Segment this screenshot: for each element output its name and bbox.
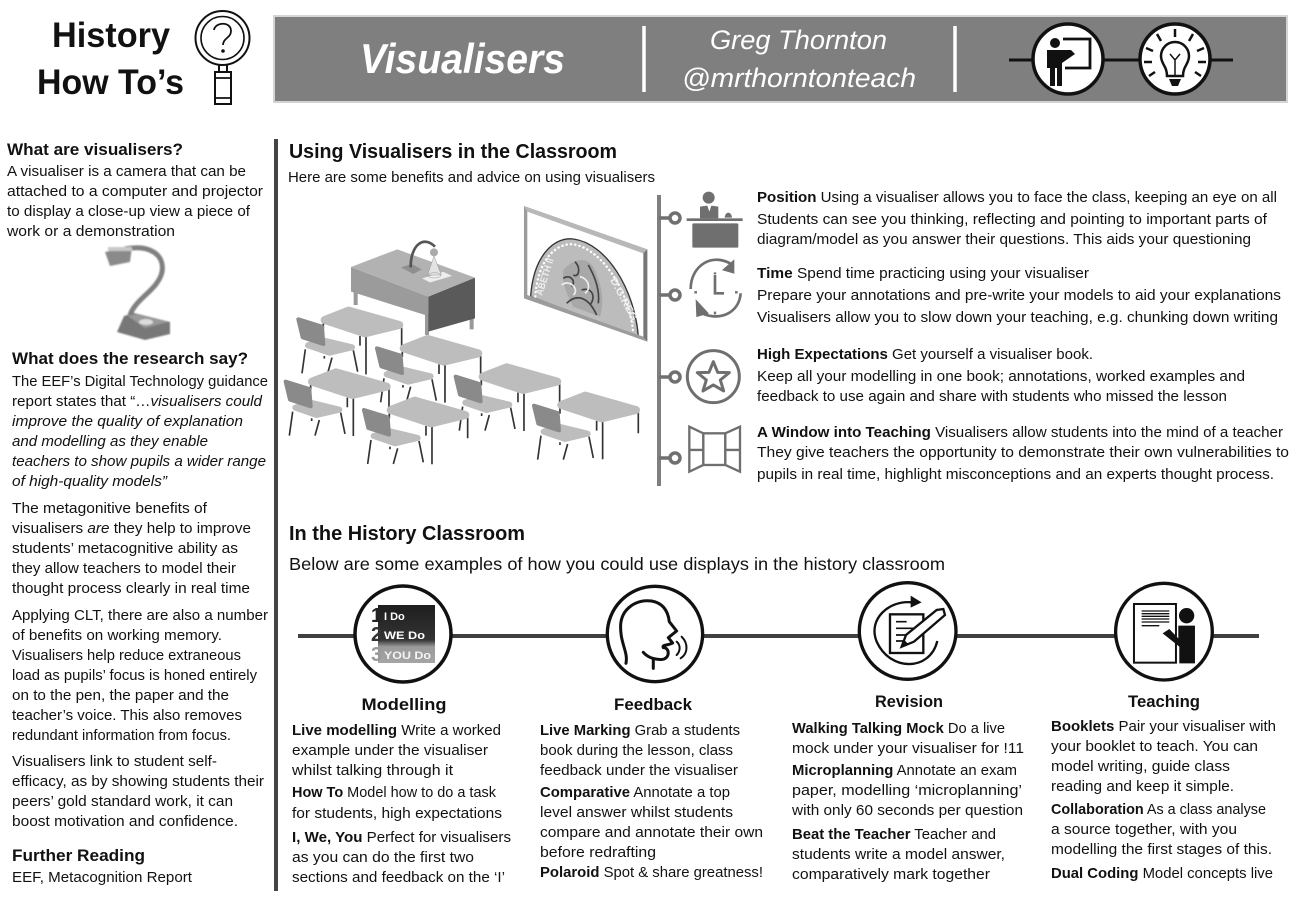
icon: teacher at desk [687,192,743,248]
icon: open window [689,427,740,472]
sidebar: what does the research say: on to the pen, the paper and the [12,687,229,704]
logo: History How To's [37,11,250,104]
benefit: high expectations [757,346,1245,405]
column: revision: students write a model answer, [792,846,1005,863]
heading: in the history classroom: Below are some examples of how you could use displays in the history classroom [289,554,945,574]
icon: I do, we do, you do: 3 [371,644,382,666]
timeline: history classroom [298,583,1259,682]
projection screen with coin [524,206,647,342]
sidebar: what does the research say: they allow teachers to model their [12,560,236,577]
sidebar: what does the research say: What does the research say? [12,349,248,368]
image: visualiser device [105,247,170,340]
author name and handle: Greg Thornton [710,25,887,55]
column: modelling: example under the visualiser [292,742,488,759]
sidebar: what does the research say: students’ metacognitive ability as [12,540,238,557]
heading: using visualisers in the classroom: Here are some benefits and advice on using visualisers [288,169,655,186]
icon: I do, we do, you do: I Do [384,611,405,623]
column: feedback: before redrafting [540,844,656,861]
logo title [37,16,184,102]
benefit: a window into teaching: pupils in real time, highlight misconceptions and an experts thought process. [757,466,1274,483]
column: teaching: reading and keep it simple. [1051,778,1234,795]
column: modelling: whilst talking through it [291,762,454,779]
author name and handle: @mrthorntonteach [682,63,916,93]
icon: magnifying glass with question mark [196,11,250,104]
benefit: a window into teaching: They give teachers the opportunity to demonstrate their own vulnerabilities to [757,444,1289,461]
column: modelling: I, We, You Perfect for visualisers [292,829,511,846]
benefit: time [757,265,1281,326]
sidebar: what are visualisers [6,140,263,240]
sidebar: what does the research say: and modelling as they enable [12,433,208,450]
sidebar: what does the research say: efficacy, as by showing students their [12,773,264,790]
column: modelling: for students, high expectations [292,805,502,822]
author name and handle [682,25,916,93]
sidebar: what are visualisers: work or a demonstration [6,223,175,240]
sidebar: what does the research say: Visualisers help reduce extraneous [12,647,241,664]
column: revision: mock under your visualiser for !11 [792,740,1024,757]
sidebar: what does the research say: boost motivation and confidence. [12,813,238,830]
visualiser on desk [401,242,453,283]
benefit: high expectations: feedback to use again and share with students who missed the lesson [757,388,1227,405]
connectors [659,213,680,463]
column: feedback: feedback under the visualiser [540,762,738,779]
sidebar: what does the research say: of high-quality models” [12,473,168,490]
column: feedback: compare and annotate their own [540,824,763,841]
benefit: high expectations: Keep all your modelling in one book; annotations, worked examples and [757,368,1245,385]
sidebar: what does the research say: teacher’s voice. This also removes [12,707,242,724]
sidebar: further reading [12,846,193,886]
teacher desk [351,249,475,335]
sidebar: what are visualisers: A visualiser is a camera that can be [7,163,246,180]
sidebar: what does the research say: Visualisers link to student self- [12,753,217,770]
logo title: How To’s [37,63,184,102]
icon: teacher pointing at document [1116,583,1212,680]
icon: clock with arrows [691,260,741,317]
icon: I do, we do, you do [355,586,451,682]
sidebar: what does the research say: of benefits on working memory. [12,627,222,644]
column: revision: Walking Talking Mock Do a live [792,720,1005,737]
column: feedback: Feedback [614,695,693,714]
sidebar: what does the research say: report states that “…visualisers could [12,393,263,410]
column: modelling [291,695,511,886]
heading: using visualisers in the classroom: Using Visualisers in the Classroom [289,141,617,163]
benefit: position: Students can see you thinking, reflecting and pointing to important parts of [757,211,1268,228]
column: modelling: Live modelling Write a worked [292,722,501,739]
column: teaching: your booklet to teach. You can [1051,738,1258,755]
projection screen with coin: D.G.REG. [607,276,641,326]
column: revision: Beat the Teacher Teacher and [792,826,996,843]
sidebar: what does the research say: Applying CLT, there are also a number [12,607,268,624]
sidebar: what does the research say: peers’ gold standard work, it can [12,793,233,810]
icon: speaking head [607,586,703,682]
header banner [274,16,1287,102]
sidebar: what does the research say: improve the quality of explanation [12,413,243,430]
column: feedback [540,695,763,881]
sidebar: what does the research say: redundant information from focus. [12,727,231,744]
column: modelling: as you can do the first two [292,849,474,866]
sidebar: what does the research say [12,349,268,830]
column: revision: Microplanning Annotate an exam [792,762,1017,779]
heading: using visualisers in the classroom [288,141,655,186]
timeline: benefit icons [659,192,743,486]
sidebar: what are visualisers: attached to a computer and projector [7,183,263,200]
heading: in the history classroom [289,523,945,574]
column: revision: comparatively mark together [792,866,990,883]
column: revision: Revision [875,692,943,711]
column: revision: with only 60 seconds per question [791,802,1023,819]
icon: I do, we do, you do: WE Do [384,630,425,642]
logo title: History [52,16,171,55]
sidebar: what does the research say: The metagonitive benefits of [12,500,208,517]
sidebar: further reading: Further Reading [12,846,145,865]
projection screen with coin: ABETH II [534,257,557,297]
column: teaching: a source together, with you [1051,821,1237,838]
sidebar: what does the research say: The EEF’s Digital Technology guidance [12,373,268,390]
column: feedback: Comparative Annotate a top [540,784,730,801]
icon: I do, we do, you do: 2 [371,624,382,646]
sidebar: what does the research say: teachers to show pupils a wider range [12,453,266,470]
column: revision: paper, modelling ‘microplanning’ [792,782,1022,799]
sidebar divider [274,139,278,891]
sidebar: what does the research say: thought process clearly in real time [12,580,250,597]
column: feedback: Polaroid Spot & share greatness! [540,864,763,881]
column: teaching: Collaboration As a class analyse [1051,801,1266,818]
column: modelling: How To Model how to do a task [292,784,496,801]
column: feedback: book during the lesson, class [540,742,733,759]
column: teaching [1051,692,1276,882]
sidebar: what are visualisers: to display a close-up view a piece of [7,203,251,220]
icon: I do, we do, you do: YOU Do [384,650,431,662]
icons: teacher and lightbulb [1009,24,1233,94]
benefit: time: Time Spend time practicing using your visualiser [757,265,1089,282]
column: modelling: Modelling [362,695,446,714]
benefit: time: Prepare your annotations and pre-write your models to aid your explanations [757,287,1281,304]
icon: star in circle [687,351,739,403]
sidebar: what are visualisers: What are visualisers? [7,140,183,159]
benefit: high expectations: High Expectations Get yourself a visualiser book. [757,346,1093,363]
column: teaching: Dual Coding Model concepts live [1051,865,1273,882]
column: teaching: model writing, guide class [1051,758,1230,775]
column: teaching: Booklets Pair your visualiser with [1051,718,1276,735]
column: feedback: Live Marking Grab a students [540,722,740,739]
benefit: position: diagram/model as you answer their questions. This aids your questioning [757,231,1251,248]
column: teaching: modelling the first stages of this. [1051,841,1272,858]
benefit: position: Position Using a visualiser allows you to face the class, keeping an eye on all [757,189,1277,206]
sidebar: what does the research say: visualisers are they help to improve [12,520,251,537]
banner title: Visualisers [360,35,565,82]
icon: revision document and pencil [859,583,956,679]
column: revision [791,692,1024,883]
sidebar: what does the research say: load as pupils’ focus is honed entirely [12,667,257,684]
column: feedback: level answer whilst students [540,804,733,821]
benefit: a window into teaching [757,424,1289,483]
icon: I do, we do, you do: 1 [371,605,382,627]
illustration: classroom with visualiser, screen and desks [286,206,647,464]
column: teaching: Teaching [1128,692,1200,711]
sidebar: further reading: EEF, Metacognition Report [12,869,193,886]
heading: in the history classroom: In the History Classroom [289,523,525,545]
benefit: time: Visualisers allow you to slow down your teaching, e.g. chunking down writing [757,309,1278,326]
benefit: a window into teaching: A Window into Teaching Visualisers allow students into the mind of a teacher [757,424,1283,441]
benefit: position [757,189,1277,248]
student desks and chairs [286,311,638,464]
column: modelling: sections and feedback on the ‘I’ [292,869,505,886]
